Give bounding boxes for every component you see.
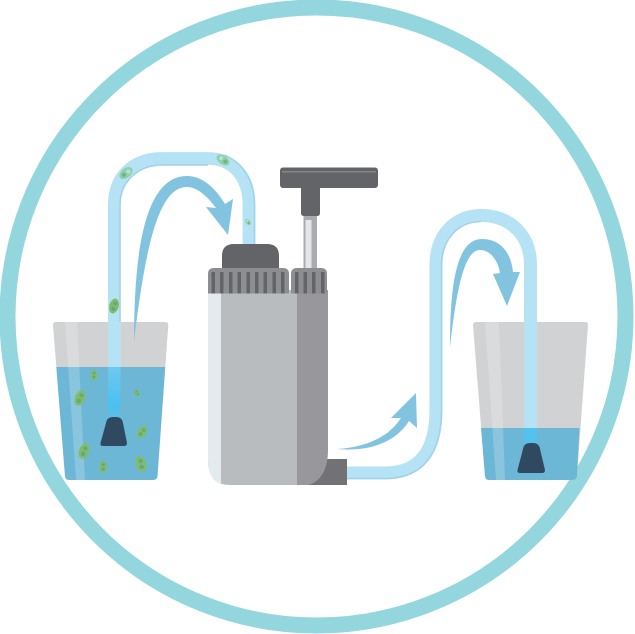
cup glass bbox=[473, 322, 588, 480]
pump shaft bbox=[304, 216, 317, 270]
outlet weight bbox=[517, 443, 545, 473]
small ribbed collar bbox=[291, 268, 327, 294]
filter cap bbox=[222, 244, 279, 268]
filter body bbox=[208, 290, 297, 485]
clean water bbox=[481, 428, 580, 480]
arrow: down into clean cup bbox=[450, 239, 520, 347]
tube inner shading bbox=[120, 165, 208, 322]
intake weight bbox=[100, 417, 127, 446]
intake tube bbox=[114, 158, 249, 367]
cup highlight bbox=[485, 322, 505, 480]
arrow: up from filter bbox=[337, 393, 417, 450]
tube outer shading bbox=[225, 155, 254, 244]
left cup of dirty water bbox=[53, 152, 254, 480]
right cup of clean water bbox=[473, 322, 588, 480]
submerged tube bbox=[108, 367, 120, 420]
pump handle bbox=[280, 168, 378, 188]
dirty water bbox=[56, 367, 165, 480]
filter pump bbox=[208, 168, 378, 485]
cup highlight bbox=[65, 322, 85, 480]
outlet tube bbox=[347, 216, 530, 473]
large ribbed collar bbox=[208, 268, 289, 294]
cup glass bbox=[53, 322, 168, 480]
outlet block bbox=[305, 459, 347, 485]
outlet tube shading bbox=[347, 222, 481, 478]
handle stem bbox=[301, 188, 320, 216]
bacteria bbox=[73, 152, 252, 473]
tube in cup bbox=[524, 322, 537, 428]
arrow: into filter bbox=[134, 176, 233, 342]
